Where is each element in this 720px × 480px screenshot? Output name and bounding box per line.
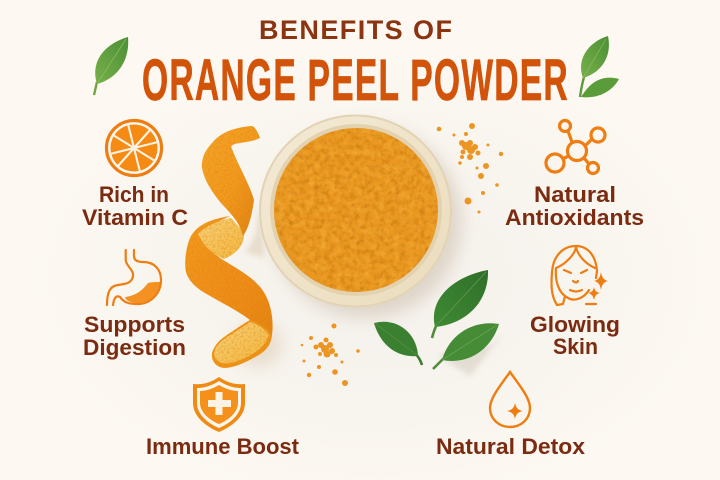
orange peel spiral	[185, 126, 282, 368]
title	[142, 15, 568, 113]
label: supports digestion: Supports	[84, 312, 185, 337]
icon: stomach	[107, 250, 161, 305]
green leaves	[374, 270, 504, 376]
label: supports digestion	[83, 312, 186, 360]
label: rich in vitamin C: Rich in	[99, 182, 169, 207]
label: natural antioxidants	[505, 182, 644, 230]
label: glowing skin: Glowing	[530, 312, 620, 337]
icon: immune shield	[193, 377, 245, 432]
icon: right header leaves	[580, 36, 619, 97]
powder sprinkle: upper right	[437, 123, 503, 214]
icon: molecule	[546, 120, 605, 174]
peel end curl	[212, 320, 272, 368]
peel inner flesh, upper	[198, 218, 244, 259]
peel end flesh	[214, 322, 269, 364]
icon: glowing face	[552, 246, 608, 305]
leaf two	[374, 322, 422, 365]
leaf one	[432, 270, 488, 338]
peel lower band	[185, 216, 273, 335]
label: supports digestion: Digestion	[83, 335, 186, 360]
leaf three	[433, 323, 499, 369]
label: immune boost: Immune Boost	[146, 434, 300, 459]
label: natural antioxidants: Natural	[534, 182, 616, 207]
bowl rim	[259, 114, 452, 308]
label: natural detox: Natural Detox	[436, 434, 586, 459]
label: glowing skin: Skin	[553, 334, 598, 359]
peel upper band	[202, 126, 260, 236]
label: glowing skin	[530, 312, 620, 359]
powder	[274, 128, 438, 292]
icon: left header leaf	[94, 37, 128, 95]
title line one: BENEFITS OF	[259, 15, 452, 45]
powder sprinkle: lower centre	[301, 324, 360, 386]
label: natural antioxidants: Antioxidants	[505, 205, 644, 230]
title line two: ORANGE PEEL POWDER	[142, 49, 568, 113]
label: rich in vitamin C: Vitamin C	[82, 205, 188, 230]
icon: detox drop	[490, 372, 530, 427]
icon: orange slice	[106, 120, 162, 176]
bowl of orange peel powder	[259, 114, 462, 318]
label: rich in vitamin C	[82, 182, 188, 230]
